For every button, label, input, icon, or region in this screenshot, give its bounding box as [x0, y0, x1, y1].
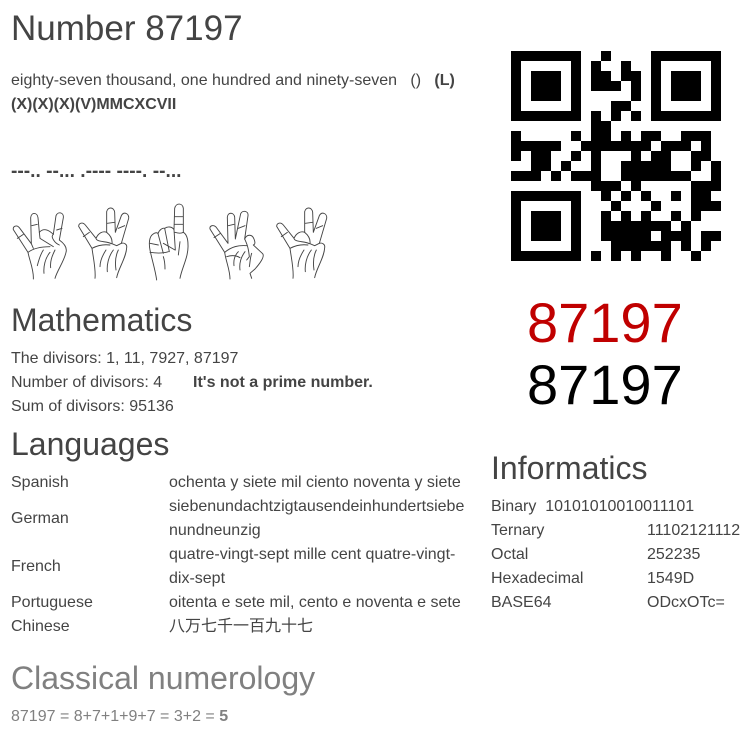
title: Number 87197	[11, 9, 243, 48]
panel: languages table: 八万七千一百九十七	[169, 618, 313, 635]
panel: languages table: dix-sept	[169, 570, 225, 587]
panel: informatics table: Binary 10101010010011101	[491, 498, 694, 515]
panel: languages table: nundneunzig	[169, 522, 261, 539]
panel: languages table: siebenundachtzigtausendeinhundertsiebe	[169, 498, 464, 515]
panel: languages table: French	[11, 558, 61, 575]
panel: languages table: ochenta y siete mil ciento noventa y siete	[169, 474, 461, 491]
panel: languages table: oitenta e sete mil, cento e noventa e sete	[169, 594, 461, 611]
QR code	[511, 51, 721, 261]
text: number in words and roman numeral	[11, 72, 455, 113]
text block: divisors: Sum of divisors: 95136	[11, 398, 174, 415]
panel: languages table: German	[11, 510, 69, 527]
panel: informatics table: 11102121112	[647, 522, 740, 539]
panel: languages table: Chinese	[11, 618, 70, 635]
panel: languages table: Portuguese	[11, 594, 93, 611]
panel: informatics table	[491, 498, 740, 611]
panel: informatics table: Hexadecimal	[491, 570, 583, 587]
icon: hand 9	[210, 211, 263, 279]
icon: hand 8	[13, 213, 66, 279]
heading: informatics: Informatics	[491, 450, 647, 486]
heading: mathematics: Mathematics	[11, 302, 192, 338]
panel: informatics table: 1549D	[647, 570, 694, 587]
panel: informatics table: ODcxOTc=	[647, 594, 725, 611]
icon: hand 1	[149, 204, 188, 280]
panel: informatics table: Octal	[491, 546, 528, 563]
panel: informatics table: 252235	[647, 546, 700, 563]
text block: divisors: The divisors: 1, 11, 7927, 87197	[11, 350, 238, 367]
text: numerology calculation: 87197 = 8+7+1+9+7 = 3+2 = 5	[11, 708, 228, 725]
text: morse code: ---.. --... .---- ----. --...	[11, 161, 181, 182]
panel: languages table: quatre-vingt-sept mille cent quatre-vingt-	[169, 546, 455, 563]
panel: languages table	[11, 474, 464, 635]
panel: languages table: Spanish	[11, 474, 69, 491]
text block: divisors: Number of divisors: 4	[11, 374, 162, 391]
heading: classical numerology: Classical numerology	[11, 660, 315, 696]
text block: divisors	[11, 350, 373, 415]
text: number in words and roman numeral: (X)(X)(X)(V)MMCXCVII	[11, 96, 176, 113]
text: It's not a prime number.	[193, 374, 373, 391]
number in red: 87197	[527, 291, 683, 354]
heading: languages: Languages	[11, 426, 169, 462]
text: number in words and roman numeral: eighty-seven thousand, one hundred and ninety-seven () (L)	[11, 72, 455, 89]
panel: informatics table: Ternary	[491, 522, 544, 539]
icon: hand 7	[79, 208, 129, 278]
number in black: 87197	[527, 353, 683, 416]
icons: sign language hands	[12, 204, 328, 280]
icon: hand 7 second	[277, 208, 327, 278]
panel: informatics table: BASE64	[491, 594, 551, 611]
